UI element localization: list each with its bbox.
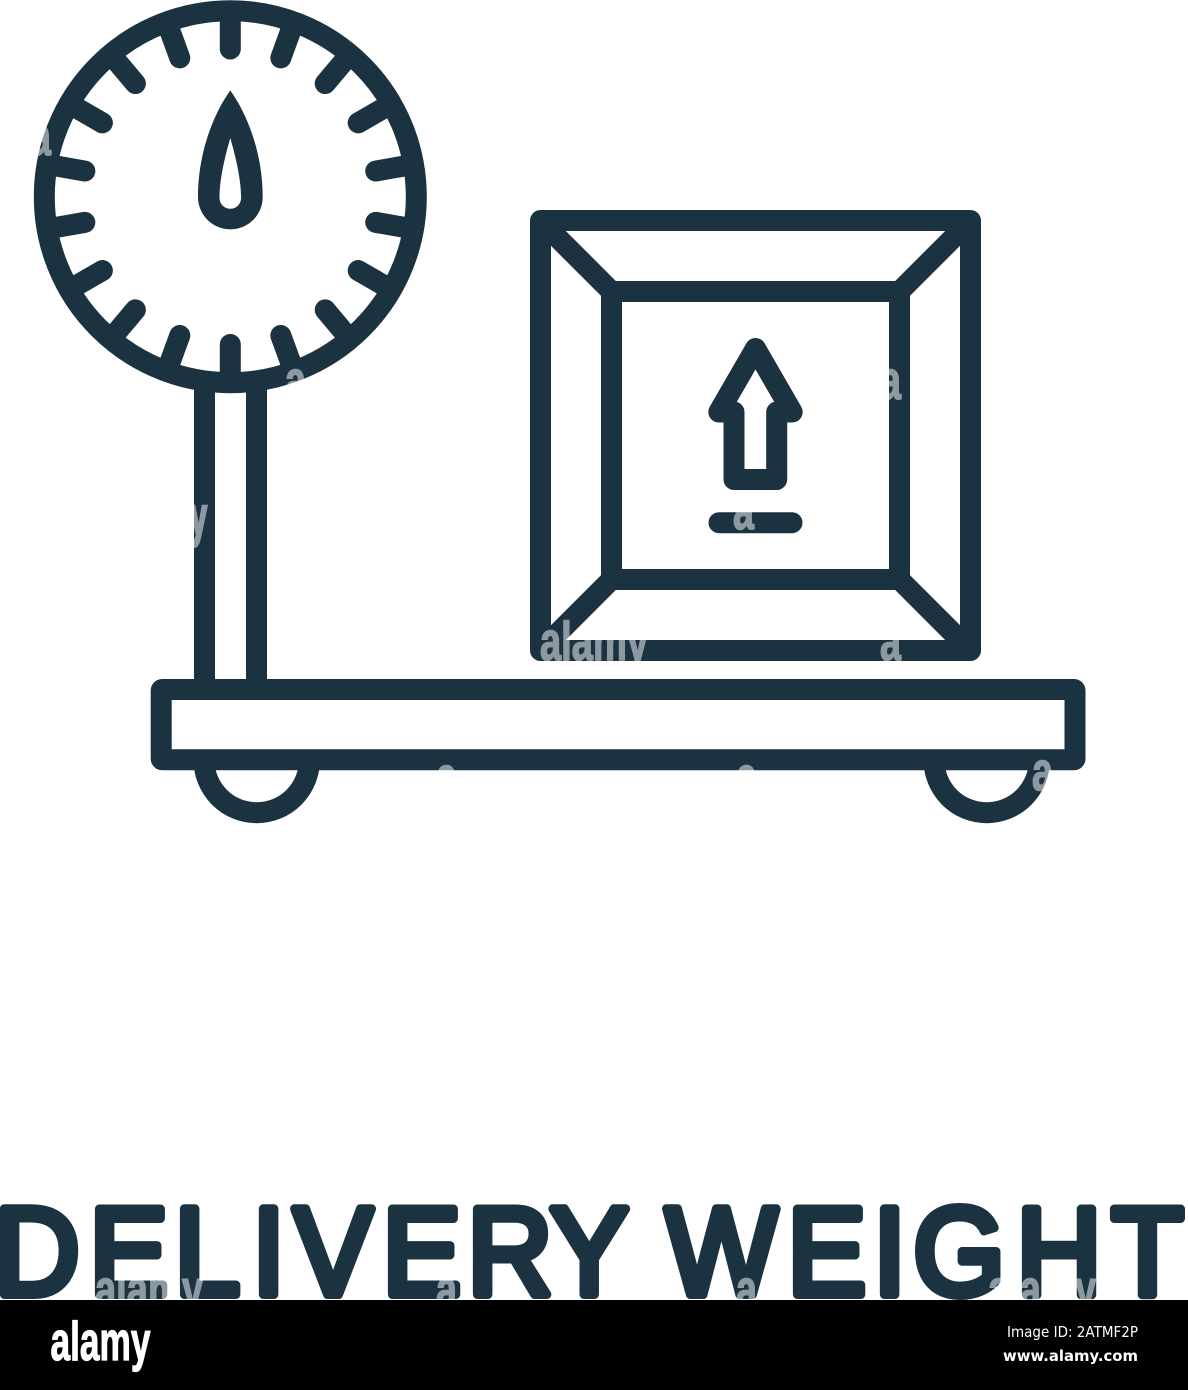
icon: parcel box	[540, 220, 970, 650]
icon: scale pole	[204, 375, 256, 690]
title: DELIVERY WEIGHT	[0, 1183, 1183, 1321]
watermark glyphs: a	[736, 1258, 757, 1320]
footer logo: alamy	[50, 1310, 151, 1372]
watermark glyphs: a	[285, 349, 306, 411]
footer image id: Image ID: 2ATMF2P	[1007, 1323, 1138, 1341]
watermark glyphs: y	[190, 485, 207, 547]
icon: this way up arrow	[719, 348, 792, 480]
watermark glyphs: a	[880, 610, 901, 672]
watermark glyphs: a	[30, 105, 51, 167]
icon: wheels	[204, 760, 1039, 813]
watermark glyphs: a	[880, 349, 901, 411]
watermark glyphs: alamy	[95, 1258, 203, 1320]
watermark glyphs	[30, 105, 1096, 1320]
watermark glyphs: a	[733, 479, 754, 541]
icon: scale platform	[161, 690, 1075, 760]
icon: dial needle	[198, 90, 263, 229]
icon: scale dial	[44, 11, 416, 383]
icon: delivery scale	[44, 11, 1075, 813]
watermark glyphs: alamy	[540, 610, 648, 672]
footer url: www.alamy.com	[1003, 1347, 1138, 1365]
watermark glyphs: a	[736, 745, 757, 807]
icon: arrow underline	[719, 512, 792, 533]
footer band	[0, 1300, 1188, 1390]
watermark glyphs: a	[436, 1258, 457, 1320]
watermark glyphs: a	[1032, 740, 1053, 802]
watermark glyphs: a	[436, 745, 457, 807]
watermark glyphs: alamy	[988, 1258, 1096, 1320]
